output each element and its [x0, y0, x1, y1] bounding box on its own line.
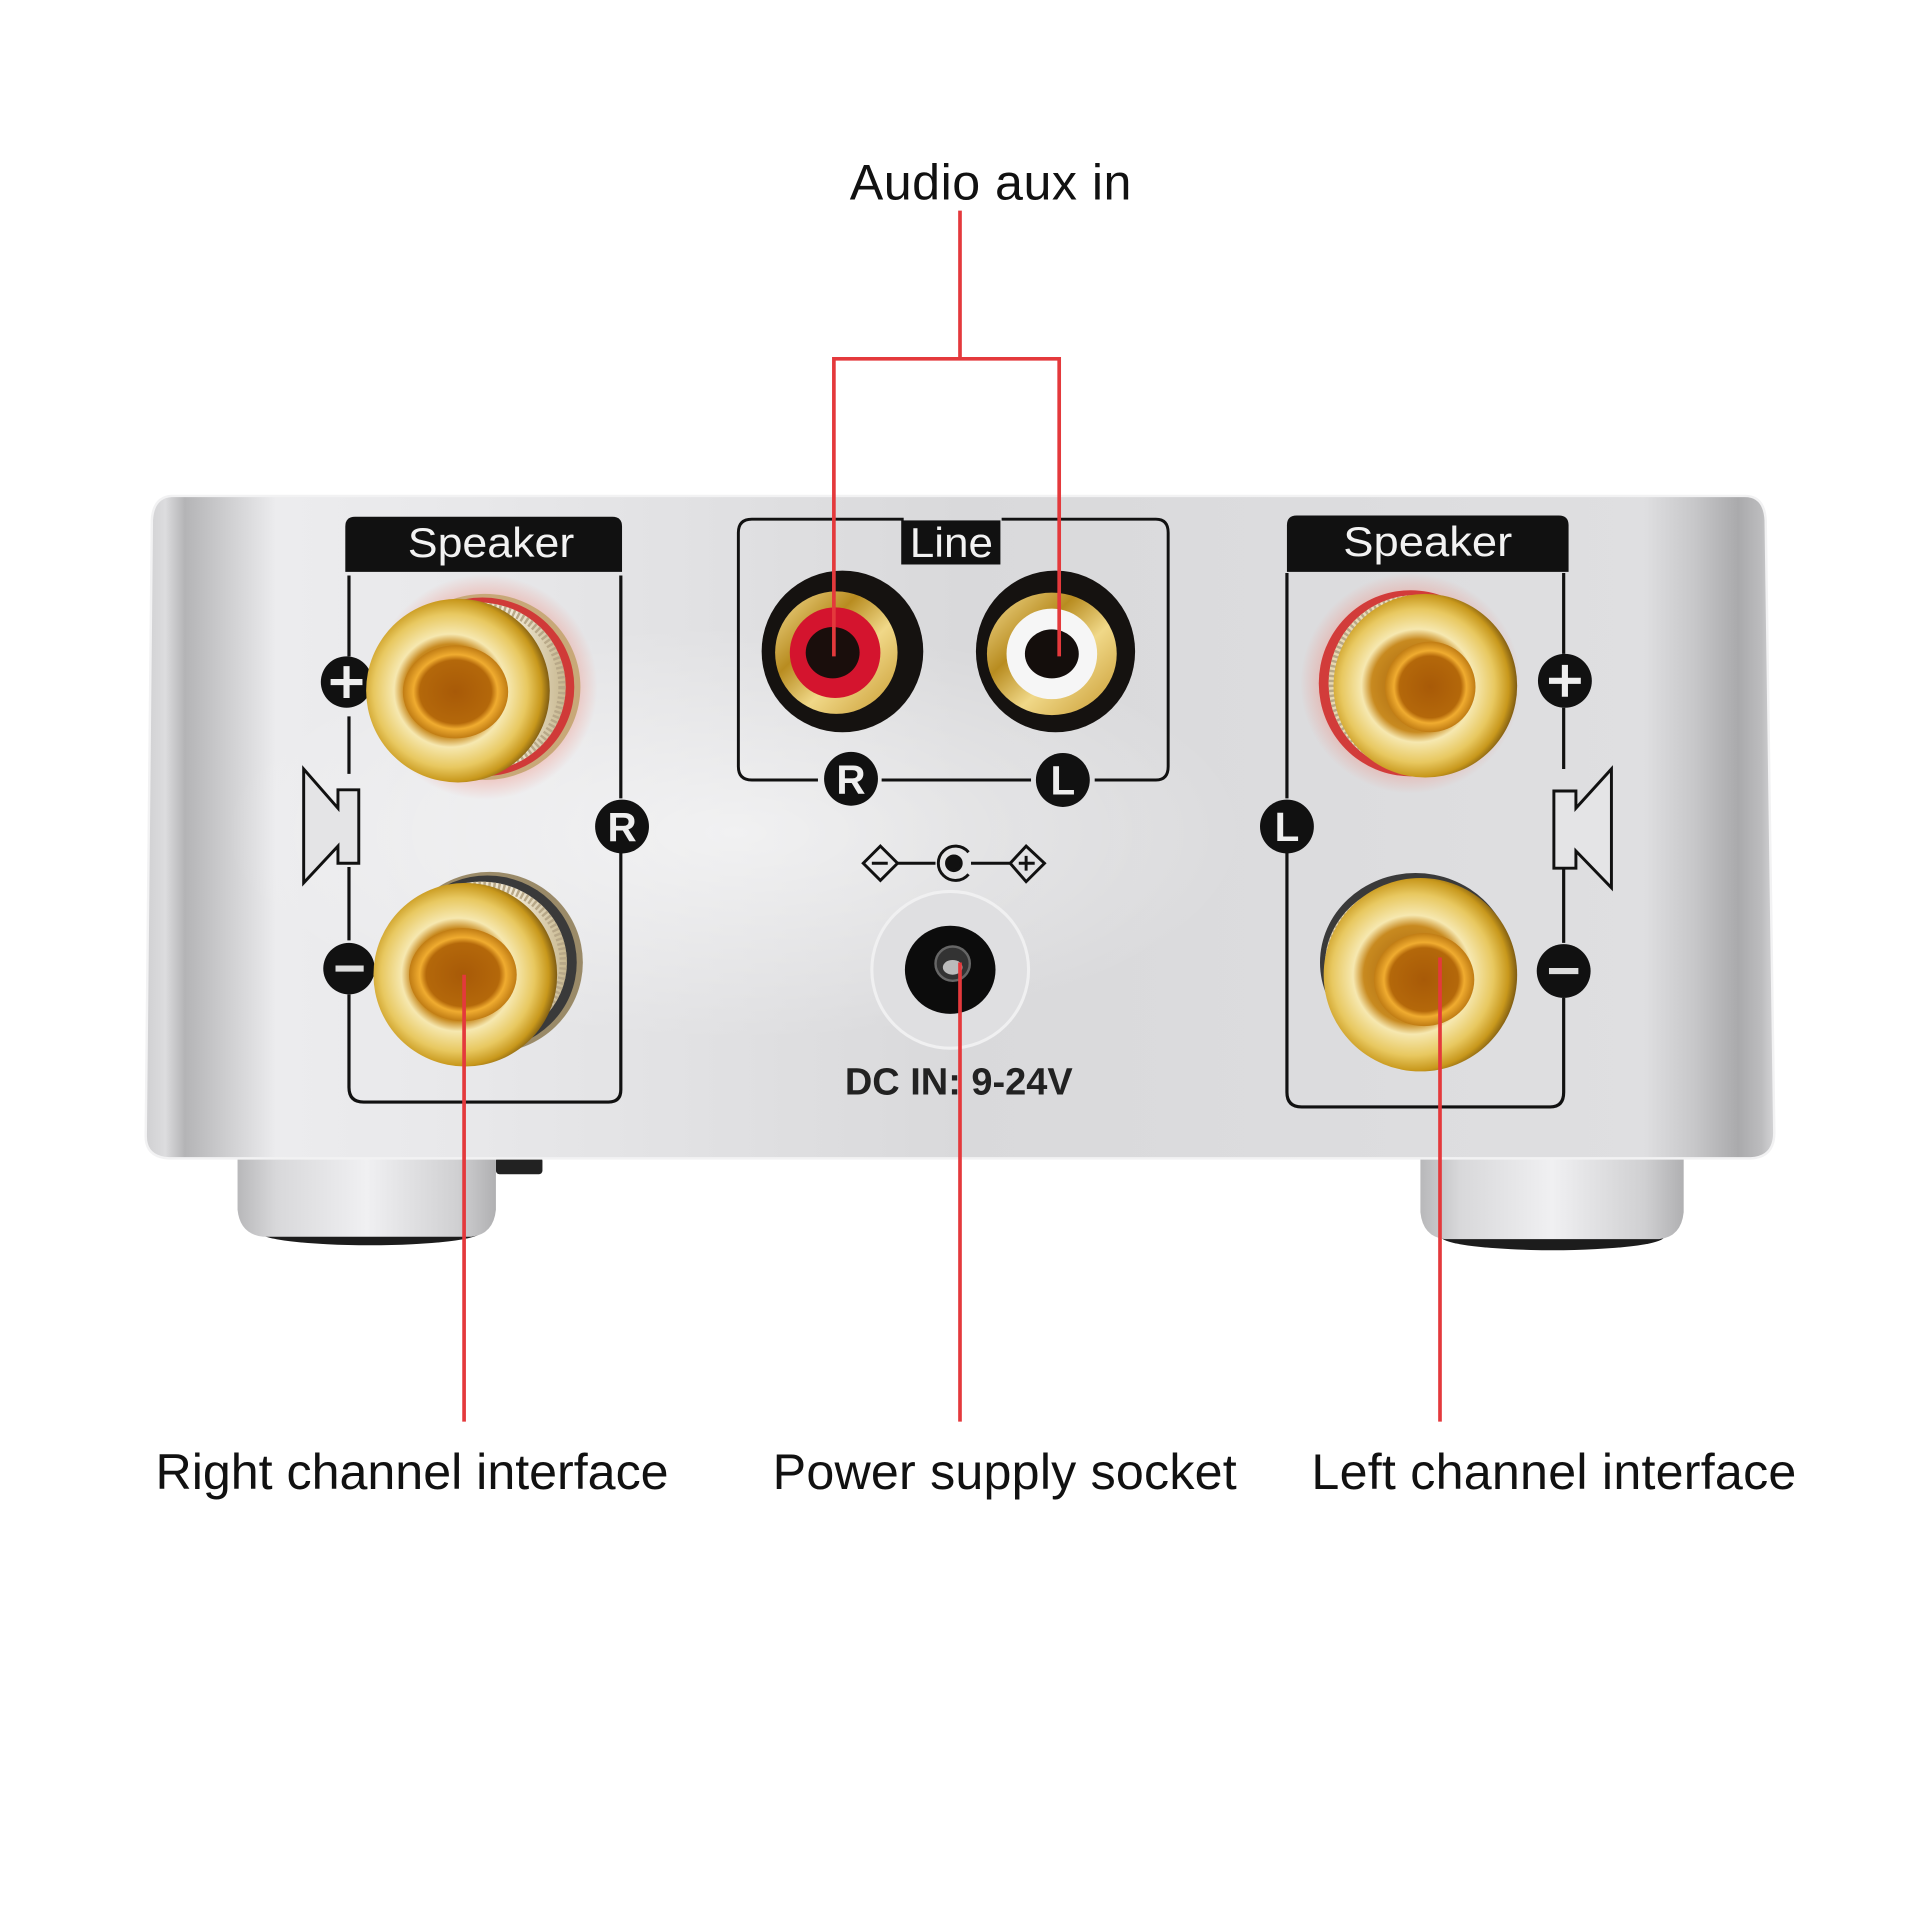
- line frame: [738, 519, 1168, 780]
- speaker frame: [349, 576, 621, 1102]
- callout line: left channel: [1438, 958, 1442, 1422]
- amplifier body: [146, 496, 1774, 1158]
- badge: L: [1036, 753, 1090, 807]
- amplifier feet: [238, 1157, 1684, 1250]
- badge: L: L: [1051, 758, 1075, 804]
- label: right channel interface: Right channel interface: [156, 1444, 669, 1500]
- terminal: black binding post: [1320, 873, 1517, 1071]
- line header: Line: [910, 519, 993, 566]
- label: power supply socket: Power supply socket: [773, 1444, 1237, 1500]
- icon: speaker symbol: [1554, 769, 1611, 888]
- socket: red RCA: [762, 571, 923, 732]
- badge: L: L: [1275, 804, 1299, 850]
- badge: minus: [323, 943, 375, 994]
- badge: R: R: [607, 804, 637, 850]
- badge: L: [1260, 800, 1314, 853]
- callout line: power supply: [958, 962, 962, 1422]
- speaker header: [1287, 516, 1569, 572]
- socket: white RCA: [976, 571, 1135, 732]
- panel: power socket: [845, 846, 1073, 1104]
- speaker header: [345, 517, 622, 572]
- icon: polarity symbol: [863, 846, 1044, 882]
- terminal: black binding post: [373, 872, 583, 1067]
- speaker frame: [1287, 573, 1564, 1107]
- voltage label: DC IN: 9-24V: [845, 1062, 1073, 1104]
- terminal: red binding post: [1300, 573, 1521, 793]
- terminal: red binding post: [366, 574, 598, 800]
- icon: speaker symbol: [304, 769, 359, 883]
- label: left channel interface: Left channel interface: [1311, 1444, 1796, 1500]
- badge: minus: [1537, 944, 1591, 998]
- badge: R: [595, 800, 649, 853]
- badge: R: [824, 752, 878, 806]
- socket hole: [905, 926, 996, 1014]
- panel: line inputs: [738, 519, 1168, 807]
- speaker header: Speaker: [1343, 518, 1512, 565]
- panel: left speaker terminals: [1260, 516, 1611, 1107]
- amplifier panel highlight: [220, 624, 1249, 1041]
- badge: R: R: [836, 756, 866, 802]
- label: audio aux in: Audio aux in: [850, 155, 1131, 211]
- callout lines: audio aux in: [834, 211, 1059, 656]
- speaker header: Speaker: [408, 519, 574, 566]
- callout line: right channel: [463, 975, 466, 1422]
- badge: plus: [321, 656, 372, 708]
- badge: plus: [1538, 654, 1592, 708]
- power socket ring: [872, 891, 1029, 1048]
- panel: right speaker terminals: [304, 517, 649, 1102]
